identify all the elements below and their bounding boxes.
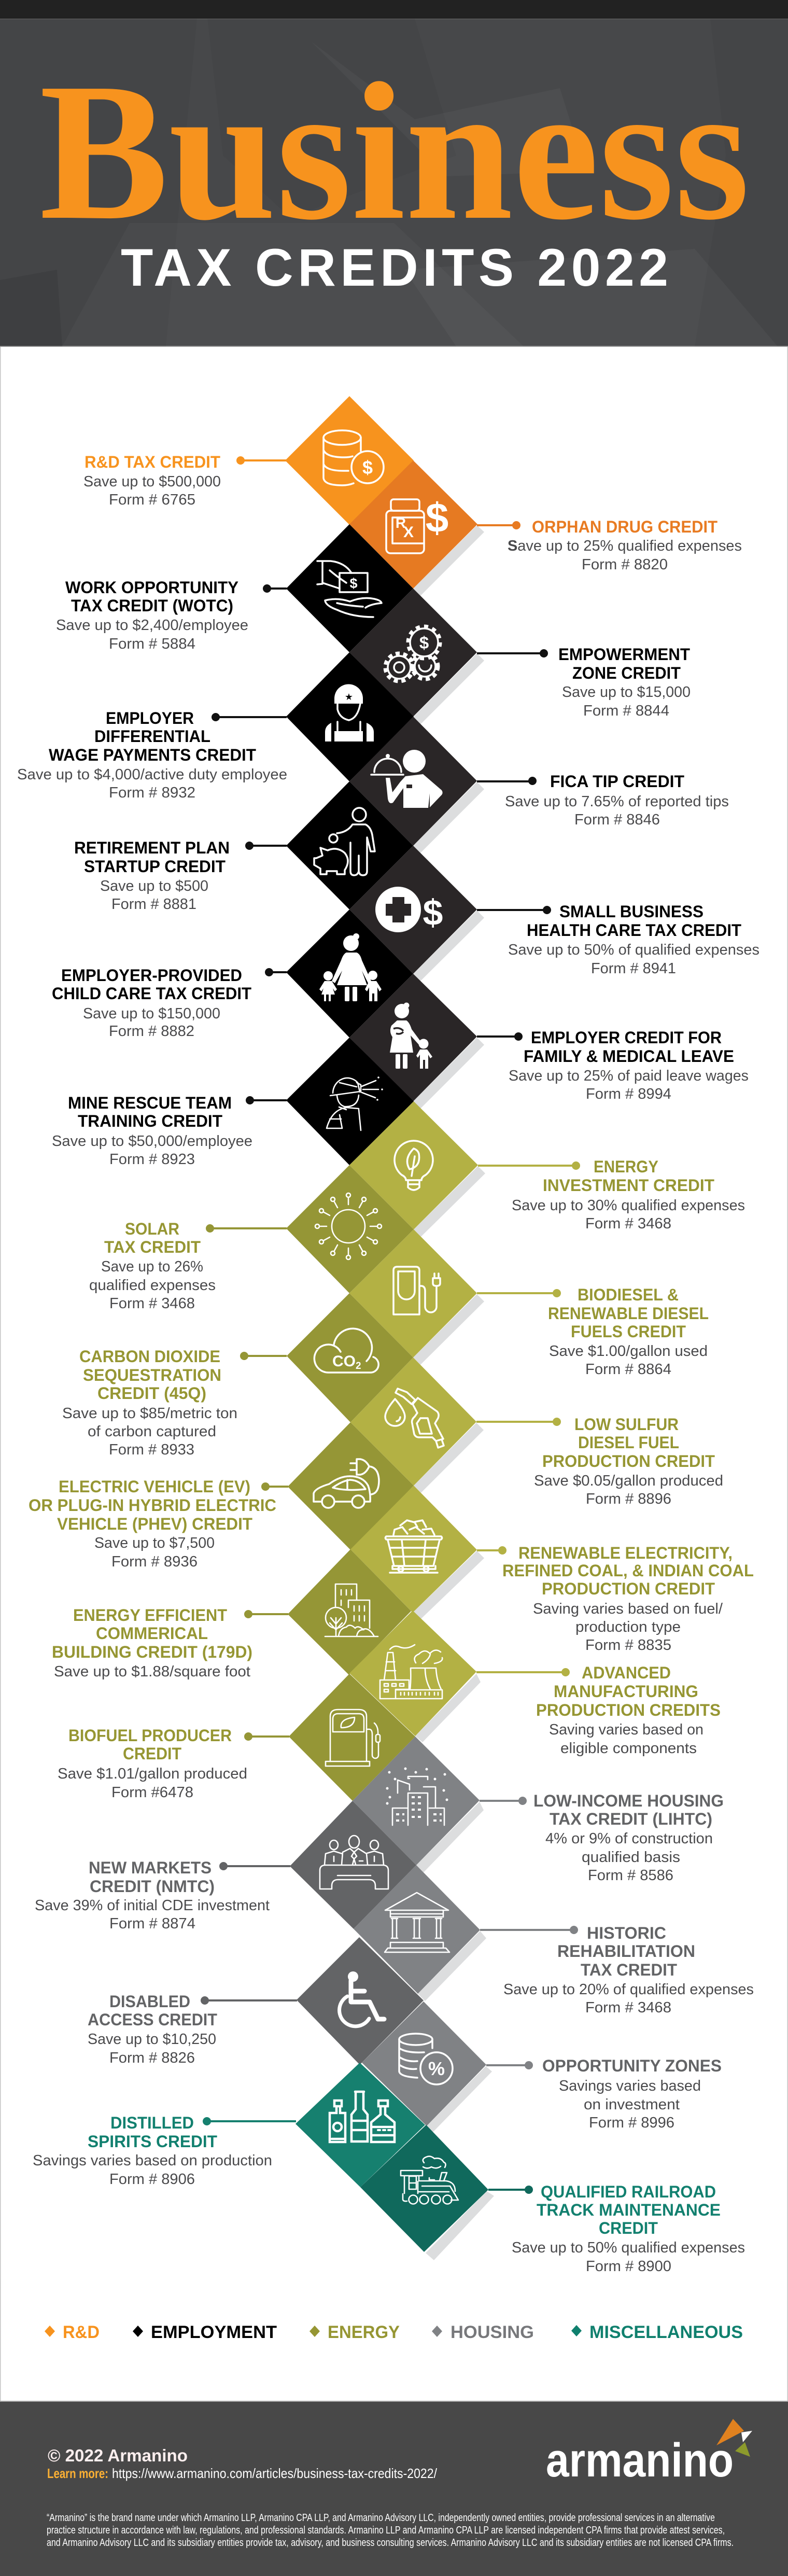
- text block: VEHICLE (PHEV) CREDIT: [57, 1515, 252, 1533]
- text block: TAX CREDIT (LIHTC): [550, 1810, 712, 1828]
- text block: Form # 8936: [111, 1553, 198, 1570]
- text block: DIESEL FUEL: [578, 1433, 679, 1452]
- credit: Family & Medical Leave: [349, 974, 749, 1109]
- legend: Housing: HOUSING: [451, 2322, 534, 2342]
- text block: ADVANCED: [582, 1663, 671, 1682]
- text block: [509, 1028, 749, 1102]
- text block: ENERGY: [594, 1157, 658, 1176]
- credit: Historic Rehabilitation: [354, 1865, 754, 2016]
- connector: [263, 584, 287, 593]
- text block: LOW-INCOME HOUSING: [533, 1791, 724, 1810]
- text block: Save up to 50% qualified expenses: [512, 2239, 745, 2256]
- text block: EMPLOYER CREDIT FOR: [531, 1028, 722, 1047]
- text block: SPIRITS CREDIT: [88, 2132, 217, 2151]
- text block: [29, 1477, 276, 1570]
- text block: RETIREMENT PLAN: [74, 838, 230, 857]
- credit: Mine Rescue: [52, 1038, 414, 1168]
- credit: Low Sulfur Diesel: [350, 1357, 723, 1507]
- icon: military worker: [325, 684, 374, 741]
- text block: Savings varies based on production: [33, 2152, 272, 2169]
- text block: SEQUESTRATION: [83, 1366, 221, 1384]
- icon: bottles: [330, 2092, 395, 2142]
- text block: Saving varies based on fuel/: [533, 1601, 723, 1617]
- text block: FAMILY & MEDICAL LEAVE: [524, 1047, 734, 1066]
- icon: wheelchair: [340, 1971, 384, 2026]
- text block: Save up to $85/metric ton: [62, 1405, 237, 1422]
- icon: miner with headlamp: [327, 1076, 383, 1130]
- credit: Solar: [89, 1165, 414, 1312]
- logo: armanino: armanino: [546, 2434, 734, 2487]
- text block: FUELS CREDIT: [571, 1322, 686, 1341]
- text block: [534, 1415, 723, 1507]
- icon: steam train: [401, 2157, 458, 2204]
- text block: Save up to $2,400/employee: [56, 617, 248, 634]
- text block: [548, 1285, 709, 1378]
- text block: STARTUP CREDIT: [84, 857, 226, 876]
- text block: Form # 8882: [109, 1023, 194, 1040]
- credit: New Markets: [35, 1801, 416, 1932]
- text block: qualified expenses: [89, 1277, 216, 1294]
- icon: coins with percent: %: [428, 2058, 445, 2079]
- text block: PRODUCTION CREDIT: [542, 1579, 715, 1598]
- text block: TRAINING CREDIT: [78, 1112, 222, 1130]
- text block: NEW MARKETS: [89, 1858, 212, 1877]
- connector: [477, 1546, 506, 1555]
- connector: [206, 1224, 287, 1233]
- text block: BIOFUEL PRODUCER: [68, 1726, 232, 1745]
- icon: city buildings: [386, 1767, 448, 1825]
- icon: coins with percent: [399, 2034, 453, 2084]
- text block: DIFFERENTIAL: [94, 727, 210, 746]
- connector: [236, 456, 286, 465]
- credit: Qualified Railroad: [360, 2125, 745, 2275]
- credit: Opportunity Zones: [362, 2001, 722, 2132]
- text block: BUILDING CREDIT (179D): [52, 1643, 252, 1661]
- credit: Renewable Electricity: [350, 1486, 754, 1654]
- text block: Save $0.05/gallon produced: [534, 1473, 723, 1489]
- text block: ORPHAN DRUG CREDIT: [532, 517, 717, 536]
- text block: TAX CREDIT: [104, 1238, 201, 1256]
- text block: TAX CREDIT: [581, 1961, 677, 1979]
- text block: EMPLOYER: [106, 709, 194, 727]
- connector: [244, 1732, 289, 1741]
- credit: Retirement Plan Startup: [74, 781, 413, 913]
- credit: Employer-Provided Child Care: [52, 909, 413, 1040]
- connector: [477, 906, 551, 914]
- text block: [502, 1544, 754, 1654]
- text block: Form # 8994: [586, 1086, 671, 1102]
- text block: TRACK MAINTENANCE: [537, 2201, 721, 2219]
- text block: Save up to 26%: [101, 1258, 203, 1275]
- text block: CREDIT (NMTC): [90, 1877, 215, 1896]
- text block: Save $1.01/gallon produced: [58, 1766, 247, 1782]
- icon: Rx bottle: X: [403, 524, 414, 541]
- text block: Save up to $1.88/square foot: [54, 1663, 250, 1680]
- text block: MINE RESCUE TEAM: [68, 1094, 232, 1112]
- connector: [203, 2117, 296, 2125]
- text block: Save up to 25% qualified expenses: [508, 538, 742, 554]
- credit: Advanced Manufacturing: [349, 1611, 721, 1757]
- icon: electric fuel pump: [393, 1267, 440, 1314]
- text block: on investment: [584, 2096, 680, 2113]
- text block: OR PLUG-IN HYBRID ELECTRIC: [29, 1496, 276, 1515]
- text block: ACCESS CREDIT: [88, 2010, 217, 2029]
- text block: ENERGY EFFICIENT: [73, 1606, 227, 1625]
- footer panel: [0, 2401, 788, 2576]
- text block: SMALL BUSINESS: [559, 902, 703, 921]
- icon: fuel nozzle and drop: [385, 1389, 444, 1448]
- text block: [512, 1157, 745, 1232]
- text block: PRODUCTION CREDITS: [536, 1701, 721, 1719]
- text block: Form # 8846: [574, 811, 660, 828]
- text block: R&D TAX CREDIT: [85, 453, 220, 471]
- text block: REHABILITATION: [557, 1942, 695, 1961]
- text block: [58, 1726, 247, 1801]
- text block: TAX CREDIT (WOTC): [71, 596, 233, 615]
- text block: Form # 8932: [109, 785, 195, 801]
- text block: Save 39% of initial CDE investment: [35, 1897, 270, 1914]
- text block: MANUFACTURING: [554, 1682, 698, 1701]
- text block: HISTORIC: [587, 1924, 666, 1942]
- connector: [476, 1418, 561, 1426]
- text block: WAGE PAYMENTS CREDIT: [49, 746, 256, 764]
- text block: Save up to $15,000: [562, 684, 691, 701]
- text block: Save up to $150,000: [83, 1005, 220, 1022]
- text block: [52, 1606, 252, 1680]
- text block: Form # 3468: [585, 1999, 671, 2016]
- icon: CO2 cloud: CO: [332, 1353, 356, 1370]
- icon: medical cross and dollar: $: [423, 892, 443, 933]
- text block: Form # 5884: [109, 636, 195, 652]
- icon: Rx bottle: [386, 495, 448, 553]
- text block: Save up to 25% of paid leave wages: [509, 1068, 749, 1084]
- connector: [478, 1161, 580, 1170]
- icon: buildings and tree: [325, 1584, 378, 1636]
- text block: Form # 8881: [111, 896, 196, 913]
- credit: Energy Investment: [349, 1101, 745, 1237]
- credit: Distilled Spirits: [33, 2063, 425, 2188]
- icon: hand with money: [317, 561, 382, 617]
- text block: [52, 966, 251, 1040]
- credit: Biofuel Producer: [58, 1674, 415, 1801]
- connector: [477, 521, 520, 529]
- text block: [508, 902, 759, 977]
- credit: Electric Vehicle: [29, 1422, 414, 1570]
- text block: [503, 1924, 754, 2016]
- text block: CREDIT (45Q): [97, 1384, 206, 1403]
- text block: Form # 8844: [583, 703, 669, 719]
- text block: Form # 8923: [109, 1151, 195, 1168]
- text block: Saving varies based on: [549, 1721, 703, 1738]
- text block: Save up to $50,000/employee: [52, 1133, 252, 1150]
- text block: [74, 838, 230, 913]
- connector: [480, 1797, 527, 1805]
- text block: [505, 772, 729, 828]
- text block: Form # 8900: [586, 2258, 671, 2275]
- text block: Form # 8996: [589, 2115, 674, 2131]
- text block: LOW SULFUR: [574, 1415, 679, 1434]
- connector: [201, 1996, 297, 2005]
- text block: 4% or 9% of construction: [545, 1830, 713, 1847]
- text block: EMPOWERMENT: [558, 645, 690, 664]
- icon: coins: [323, 430, 384, 485]
- legend: Energy: ENERGY: [328, 2322, 400, 2342]
- title: Business: Business: [39, 43, 750, 261]
- credit: FICA Tip: [349, 717, 729, 853]
- connector: [477, 1032, 523, 1041]
- text block: EMPLOYER-PROVIDED: [61, 966, 242, 985]
- text block: COMMERICAL: [96, 1624, 208, 1643]
- connector: [245, 842, 287, 850]
- credit: Carbon Dioxide Sequestration: [62, 1293, 413, 1458]
- text block: RENEWABLE DIESEL: [548, 1304, 709, 1323]
- text block: of carbon captured: [88, 1423, 216, 1440]
- text block: Form # 8835: [585, 1637, 671, 1654]
- legend: Miscellaneous: MISCELLANEOUS: [589, 2322, 743, 2342]
- text block: Save up to $500: [100, 878, 208, 894]
- connector: [244, 1610, 288, 1618]
- header panel: [0, 0, 788, 347]
- connector: [219, 1862, 290, 1870]
- connector: [476, 1668, 570, 1676]
- icon: gears: [385, 626, 440, 681]
- text block: Form # 8906: [109, 2171, 195, 2188]
- text block: [512, 2182, 745, 2275]
- credit: Orphan Drug: [349, 460, 742, 596]
- icon: factory: [380, 1645, 442, 1699]
- text block: [35, 1858, 270, 1932]
- connector: [477, 777, 537, 785]
- text block: CREDIT: [599, 2219, 658, 2237]
- icon: hand with money: $: [349, 576, 358, 591]
- text block: PRODUCTION CREDIT: [542, 1452, 715, 1471]
- text block: QUALIFIED RAILROAD: [541, 2182, 716, 2201]
- text block: OPPORTUNITY ZONES: [542, 2056, 722, 2075]
- connector: [265, 968, 287, 976]
- text block: Form # 6765: [109, 492, 195, 508]
- text block: Save up to 20% of qualified expenses: [503, 1981, 754, 1998]
- credit: Employer Differential Wage: [17, 652, 414, 801]
- text block: Form # 8864: [585, 1361, 671, 1378]
- text block: [52, 1094, 252, 1168]
- icon: Rx bottle: R: [396, 515, 406, 531]
- text block: Save up to 30% qualified expenses: [512, 1197, 745, 1214]
- text block: DISABLED: [109, 1992, 190, 2011]
- icon: coal cart: [386, 1520, 442, 1573]
- credit: Biodiesel: [349, 1229, 709, 1378]
- legend: R&D: R&D: [63, 2322, 100, 2342]
- icon: mother with baby and child: [390, 1003, 432, 1069]
- icon: bulb with leaf: [395, 1141, 433, 1190]
- credit: R&D: [83, 396, 414, 525]
- text block: BIODIESEL &: [578, 1285, 679, 1304]
- legend: [45, 2322, 743, 2342]
- icon: Rx bottle: $: [426, 495, 448, 541]
- subtitle: TAX CREDITS 2022: [121, 238, 668, 297]
- text block: FICA TIP CREDIT: [550, 772, 684, 791]
- connector: [486, 2061, 533, 2069]
- text block: ZONE CREDIT: [572, 664, 681, 682]
- text block: Savings varies based: [559, 2078, 701, 2094]
- text block: WORK OPPORTUNITY: [65, 578, 238, 597]
- icon: gears: $: [419, 633, 429, 652]
- credit: Low-Income Housing: [353, 1737, 724, 1884]
- icon: sun circuit: [315, 1193, 382, 1259]
- connector: [480, 1926, 578, 1934]
- text block: SOLAR: [125, 1220, 179, 1238]
- text block: eligible components: [560, 1740, 697, 1757]
- text block: [536, 1663, 721, 1757]
- credit: WOTC: [56, 524, 413, 652]
- text block: DISTILLED: [110, 2113, 194, 2132]
- text block: [56, 578, 248, 652]
- icon: military worker: ★: [345, 692, 353, 702]
- text block: Save up to $7,500: [94, 1535, 215, 1551]
- text block: HEALTH CARE TAX CREDIT: [527, 921, 741, 940]
- text block: Save up to 7.65% of reported tips: [505, 793, 729, 810]
- connector: [246, 1096, 287, 1104]
- icon: meeting table: [320, 1836, 388, 1889]
- text block: Form # 8826: [109, 2050, 195, 2066]
- icon: waiter: [371, 750, 443, 808]
- text block: Form # 8933: [109, 1441, 194, 1458]
- icon: biofuel pump: [326, 1710, 380, 1766]
- icon: electric car: [314, 1459, 379, 1508]
- connector: [477, 649, 548, 657]
- text block: Form # 8896: [586, 1491, 671, 1507]
- text block: Form # 3468: [585, 1215, 671, 1232]
- text block: Save up to $500,000: [83, 473, 221, 490]
- icon: classical building: [385, 1893, 449, 1952]
- copyright: © 2022 Armanino: [48, 2446, 188, 2465]
- connector: [240, 1352, 287, 1360]
- text block: Save up to $4,000/active duty employee: [17, 766, 287, 783]
- connector: [261, 1482, 288, 1491]
- connector: [212, 713, 287, 721]
- text block: ELECTRIC VEHICLE (EV): [59, 1477, 250, 1496]
- text block: [83, 453, 221, 508]
- text block: CREDIT: [123, 1744, 181, 1763]
- text block: Save up to $10,250: [88, 2031, 216, 2048]
- icon: CO2 cloud: [314, 1328, 378, 1373]
- text block: qualified basis: [582, 1849, 680, 1866]
- text block: [533, 1791, 724, 1884]
- text block: [542, 2056, 722, 2131]
- text block: CARBON DIOXIDE: [79, 1347, 220, 1366]
- credit: Energy Efficient Commercial Building: [52, 1549, 411, 1680]
- text block: [33, 2113, 272, 2188]
- text block: [508, 517, 742, 573]
- icon: mother and two children: [319, 933, 382, 1001]
- text block: INVESTMENT CREDIT: [543, 1176, 714, 1195]
- text block: Form # 8586: [588, 1867, 673, 1884]
- credit: Small Business Health Care: [349, 846, 759, 981]
- text block: CHILD CARE TAX CREDIT: [52, 984, 251, 1003]
- icon: medical cross and dollar: [375, 887, 443, 933]
- connector: [477, 1289, 561, 1297]
- credit: Disabled Access: [88, 1937, 424, 2066]
- text block: [558, 645, 691, 719]
- icon: CO2 cloud: 2: [356, 1361, 361, 1371]
- text block: [88, 1992, 217, 2066]
- icon: coins: $: [362, 457, 373, 478]
- text block: Save up to 50% of qualified expenses: [508, 942, 759, 958]
- legend: R&D: [45, 2322, 100, 2342]
- text block: [89, 1220, 216, 1312]
- learn more link: Learn more:: [47, 2466, 108, 2481]
- text block: Form #6478: [111, 1784, 193, 1801]
- text block: [17, 709, 287, 801]
- text block: [62, 1347, 237, 1458]
- text block: RENEWABLE ELECTRICITY,: [518, 1544, 733, 1562]
- text block: Form # 3468: [109, 1295, 195, 1312]
- text block: Form # 8941: [591, 960, 676, 977]
- text block: Form # 8820: [582, 556, 668, 573]
- text block: REFINED COAL, & INDIAN COAL: [502, 1561, 754, 1580]
- disclaimer: [47, 2512, 734, 2549]
- credit: Empowerment Zone: [349, 589, 691, 724]
- legend: Employment: EMPLOYMENT: [151, 2322, 277, 2342]
- text block: Save $1.00/gallon used: [549, 1343, 708, 1360]
- learn more link: https://www.armanino.com/articles/business-tax-credits-2022/: [112, 2466, 438, 2481]
- icon: person with piggy bank: [314, 808, 375, 875]
- connector: [488, 2186, 533, 2194]
- text block: Form # 8874: [109, 1915, 195, 1932]
- text block: production type: [575, 1619, 681, 1635]
